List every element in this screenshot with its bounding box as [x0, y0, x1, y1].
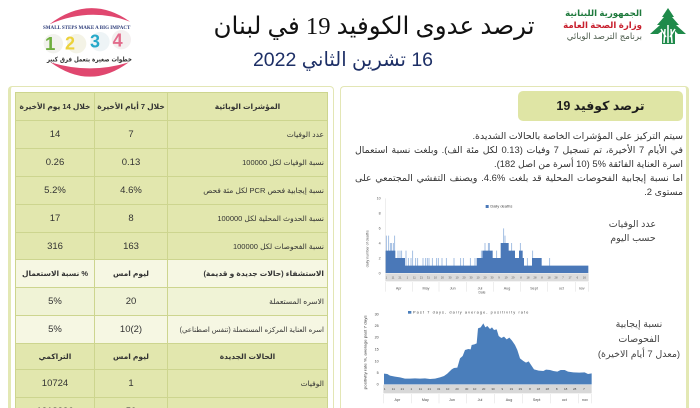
y axis labels: 0 [379, 271, 381, 275]
chart: daily deaths: 10 [434, 276, 437, 280]
chart: daily deaths: 1 [386, 276, 388, 280]
table: epidemiological indicators: 20 [126, 296, 136, 307]
chart: positivity rate: 10 [446, 387, 450, 391]
label: test positivity rate: نسبة إيجابية [616, 319, 662, 330]
month labels: May [422, 398, 429, 402]
y axis labels: 10 [375, 359, 379, 363]
label: deaths per day [609, 219, 656, 244]
chart: daily deaths: 30 [449, 276, 452, 280]
y axis labels: 15 [375, 348, 379, 352]
month labels: oct [562, 398, 567, 402]
table: epidemiological indicators [15, 92, 328, 408]
label: deaths per day: عدد الوفيات [609, 219, 656, 230]
month labels: Apr [396, 286, 402, 290]
chart: positivity rate: 28 [546, 387, 549, 391]
chart: positivity rate: 8 [529, 387, 531, 391]
table: epidemiological indicators: 14 [50, 129, 60, 140]
table: epidemiological indicators: 1 [128, 378, 134, 389]
table: epidemiological indicators: ليوم امس [113, 269, 149, 278]
chart: positivity rate: 11 [392, 387, 395, 391]
chart: positivity rate: 10 [473, 387, 477, 391]
chart: daily deaths: 8 [520, 276, 522, 280]
y axis labels: 8 [379, 212, 381, 216]
x axis ticks band [383, 385, 592, 393]
logo: small steps make a big impact: 1 [45, 33, 55, 54]
chart: daily deaths: 20 [441, 276, 444, 280]
table: epidemiological indicators: % نسبة الاستعمال [22, 269, 88, 278]
chart: positivity rate: 11 [419, 387, 422, 391]
month labels: May [423, 286, 430, 290]
chart: positivity rate: 9 [501, 387, 503, 391]
chart: daily deaths: 11 [392, 276, 395, 280]
table: epidemiological indicators: التراكمي [39, 352, 71, 361]
y axis labels: 0 [377, 383, 379, 387]
month labels [394, 398, 588, 402]
y axis labels [377, 197, 381, 275]
month labels: Sept [533, 398, 540, 402]
chart: daily deaths [365, 197, 589, 294]
chart: positivity rate: 21 [401, 387, 404, 391]
text block: surveillance summary: اما نسبة إيجابية الفحوصات المحلية قد بلغت %4.6. ويصنف التفشي المجتمعي على [355, 172, 683, 183]
table: epidemiological indicators: اسره العناية المركزه المستعملة (تنفس اصطناعي) [180, 326, 324, 334]
month labels: Aug [506, 398, 512, 402]
chart: positivity rate: 1 [384, 387, 386, 391]
y axis labels: 5 [377, 371, 379, 375]
chart: positivity rate: 18 [564, 387, 568, 391]
text block: surveillance summary: سيتم التركيز على المؤشرات الخاصة بالحالات الشديدة. [472, 130, 683, 141]
month labels: nov [582, 398, 588, 402]
month labels: Sept [530, 286, 538, 290]
chart: daily deaths: 19 [505, 276, 508, 280]
text block: surveillance summary: في الأيام 7 الأخيرة، تم تسجيل 7 وفيات (0.13 لكل مئة الف). وبلغت نسبة استعمال [355, 144, 683, 155]
table: epidemiological indicators: 5% [48, 324, 62, 335]
logo: small steps make a big impact: SMALL STEPS MAKE A BIG IMPACT [43, 25, 131, 31]
heading: covid-19 surveillance: ترصد كوفيد 19 [556, 99, 645, 113]
chart: daily deaths: 30 [491, 276, 494, 280]
table: epidemiological indicators: 5% [48, 296, 62, 307]
logo: small steps make a big impact: 4 [113, 30, 123, 50]
panel: right surveillance frame [340, 86, 689, 408]
y axis labels: 4 [379, 242, 381, 246]
table: epidemiological indicators: الحالات الجديدة [220, 352, 275, 361]
chart: daily deaths: daily number of deaths [365, 230, 369, 267]
chart: daily deaths: 30 [470, 276, 473, 280]
y axis labels: 25 [375, 324, 379, 328]
chart: positivity rate: positivity rate %, average past 7 days [363, 315, 367, 389]
logo: ministry of public health text: الجمهورية اللبنانية [565, 8, 642, 18]
chart: daily deaths: 31 [427, 276, 430, 280]
chart: daily deaths: Daily deaths [490, 204, 512, 209]
chart: daily deaths: 18 [548, 276, 551, 280]
logo: ministry of public health text: برنامج الترصد الوبائي [567, 31, 642, 41]
logo: ministry of public health text: وزارة الصحة العامة [563, 20, 642, 30]
chart: daily deaths: 20 [463, 276, 466, 280]
chart: positivity rate: 28 [573, 387, 577, 391]
table: epidemiological indicators: الاستشفاء (حالات جديدة و قديمة) [203, 269, 324, 278]
logo: small steps make a big impact: 3 [90, 32, 100, 52]
panel: left table frame [8, 86, 334, 408]
table: epidemiological indicators: نسبة إيجابية فحص PCR لكل مئة فحص [203, 186, 324, 195]
table: epidemiological indicators: 17 [50, 213, 60, 224]
chart: positivity rate [363, 311, 592, 404]
table: epidemiological indicators: 10724 [42, 378, 68, 389]
table: epidemiological indicators: نسبة الفحوصات لكل 100000 [233, 242, 324, 250]
table: epidemiological indicators: الاسره المستعملة [269, 297, 324, 306]
text block: surveillance summary [355, 130, 683, 197]
logo: small steps make a big impact: 2 [65, 33, 75, 53]
bars [386, 243, 588, 273]
chart: positivity rate: 30 [491, 387, 495, 391]
chart: daily deaths: 10 [456, 276, 459, 280]
legend [486, 205, 489, 208]
chart: daily deaths: 1 [407, 276, 409, 280]
table: epidemiological indicators: خلال 7 أيام الأخيرة [97, 102, 165, 111]
chart: daily deaths: 7 [562, 276, 564, 280]
chart: positivity rate: 18 [537, 387, 540, 391]
chart: positivity rate: 8 [556, 387, 558, 391]
chart: daily deaths: 16 [583, 276, 586, 280]
chart: positivity rate: Past 7 days, daily average, positivity rate [413, 311, 528, 315]
table: epidemiological indicators: 4.6% [120, 185, 142, 196]
y axis labels: 2 [379, 257, 381, 261]
x axis ticks band [385, 273, 589, 281]
label: test positivity rate: (معدل 7 أيام الاخيرة) [598, 349, 680, 360]
chart: positivity rate: 29 [519, 387, 522, 391]
table: epidemiological indicators: عدد الوفيات [287, 130, 324, 139]
chart: daily deaths: 28 [555, 276, 558, 280]
subtitle: date: 16 تشرين الثاني 2022 [253, 49, 433, 71]
table: epidemiological indicators: 0.26 [46, 157, 64, 168]
chart: daily deaths: 29 [512, 276, 515, 280]
y axis labels: 6 [379, 227, 381, 231]
month labels: Apr [394, 398, 401, 402]
chart: daily deaths: 21 [399, 276, 402, 280]
table: epidemiological indicators: 5.2% [44, 185, 66, 196]
table: epidemiological indicators: 10(2) [120, 324, 142, 335]
chart: daily deaths: 8 [541, 276, 543, 280]
table: epidemiological indicators: خلال 14 يوم الأخيرة [20, 102, 90, 111]
chart: positivity rate: 19 [510, 387, 513, 391]
table: epidemiological indicators: 163 [123, 240, 139, 252]
month labels: Jun [450, 286, 456, 290]
table: epidemiological indicators: نسبة الوفيات لكل 100000 [242, 158, 324, 167]
month labels: Jul [478, 398, 483, 402]
y axis labels [375, 312, 379, 387]
text block: surveillance summary: اسرة العناية الفائقة %5 (10 أسرة من اصل 182). [494, 158, 683, 169]
month labels: oct [559, 286, 564, 290]
icon: cedar tree with hand [650, 8, 686, 44]
chart: daily deaths: 6 [577, 276, 579, 280]
logo: ministry of public health text [563, 8, 642, 41]
chart: positivity rate: 7 [583, 387, 585, 391]
label: test positivity rate [598, 319, 680, 360]
chart: positivity rate: 31 [437, 387, 441, 391]
chart: daily deaths: 17 [569, 276, 572, 280]
chart: daily deaths: 28 [534, 276, 537, 280]
area [384, 323, 592, 384]
chart: positivity rate: 20 [455, 387, 459, 391]
table: epidemiological indicators: 0.13 [122, 157, 140, 168]
chart: daily deaths: 20 [484, 276, 487, 280]
month labels: Aug [504, 286, 510, 290]
chart: daily deaths: 18 [527, 276, 530, 280]
legend [408, 311, 411, 314]
y axis labels: 30 [375, 312, 379, 316]
y axis labels: 10 [377, 197, 381, 201]
table: epidemiological indicators: 316 [47, 240, 63, 252]
chart: daily deaths: 9 [498, 276, 500, 280]
chart: positivity rate: 1 [410, 387, 412, 391]
title: ترصد عدوى الكوفيد 19 في لبنان [213, 13, 535, 40]
logo: small steps make a big impact [43, 8, 132, 77]
month labels: nov [579, 286, 585, 290]
table: epidemiological indicators: الوفيات [301, 379, 324, 388]
chart: positivity rate: 21 [428, 387, 431, 391]
table: epidemiological indicators: 8 [128, 213, 134, 224]
table: epidemiological indicators: المؤشرات الوبائية [215, 102, 280, 111]
table: epidemiological indicators: 7 [128, 129, 134, 140]
chart: daily deaths: 11 [413, 276, 416, 280]
chart: daily deaths: 10 [477, 276, 480, 280]
chart: positivity rate: 30 [465, 387, 469, 391]
y axis labels: 20 [375, 336, 379, 340]
month labels: Date [478, 290, 486, 294]
text block: surveillance summary: مستوى 2. [644, 186, 683, 197]
chart: positivity rate: 20 [482, 387, 486, 391]
chart: daily deaths: 21 [420, 276, 423, 280]
table: epidemiological indicators: نسبة الحدوث المحلية لكل 100000 [217, 214, 324, 223]
month labels [396, 286, 585, 294]
spikes [386, 228, 550, 273]
table: epidemiological indicators: ليوم امس [113, 352, 149, 361]
heading: covid-19 surveillance [518, 91, 683, 121]
month labels: Jun [449, 398, 455, 402]
month labels: Jul [478, 286, 483, 290]
label: deaths per day: حسب اليوم [610, 233, 656, 244]
label: test positivity rate: الفحوصات [618, 334, 660, 345]
